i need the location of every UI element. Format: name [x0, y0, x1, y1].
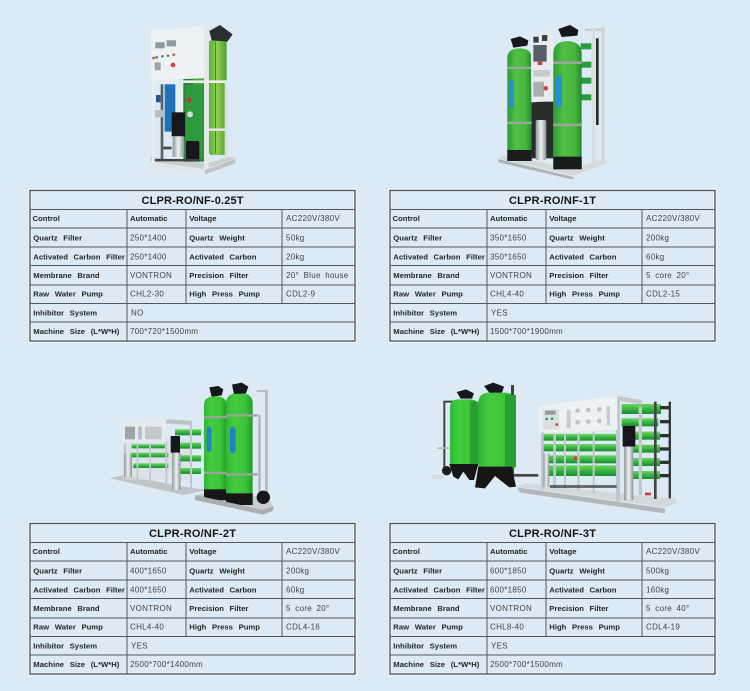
row: membrane brand: 5 core 20°: [646, 271, 690, 280]
row: raw water pump: CDL2-9: [286, 290, 316, 298]
row: machine size: [33, 327, 198, 336]
row: quartz filter: [393, 234, 669, 242]
row: raw water pump: Raw Water Pump: [33, 290, 103, 298]
row: control: AC220V/380V: [286, 214, 340, 223]
row: quartz filter: 200kg: [646, 234, 669, 242]
row: control: [32, 547, 340, 556]
row: inhibitor system: YES: [491, 308, 508, 317]
row: membrane brand: 20° Blue house: [286, 271, 349, 280]
row: raw water pump: [393, 290, 680, 298]
row: activated carbon: [393, 252, 665, 262]
row: raw water pump: CDL2-15: [646, 290, 680, 298]
row: control: Automatic: [490, 214, 528, 223]
row: control: [392, 547, 700, 556]
row: raw water pump: CHL8-40: [490, 622, 524, 632]
row: control: Automatic: [130, 547, 168, 556]
row: activated carbon: Activated Carbon: [189, 586, 257, 594]
row: activated carbon: [33, 586, 305, 594]
row: inhibitor system: Inhibitor System: [33, 641, 97, 650]
row: quartz filter: Quartz Weight: [189, 234, 245, 242]
row: quartz filter: 50kg: [286, 234, 305, 242]
table title: CLPR-RO/NF-1T: [509, 195, 596, 207]
row: activated carbon: Activated Carbon Filter: [33, 586, 125, 594]
row: activated carbon: 250*1400: [130, 252, 167, 262]
row: membrane brand: Membrane Brand: [33, 271, 100, 280]
spec table: CLPR-RO/NF-2T: [30, 524, 355, 674]
row: inhibitor system: YES: [491, 641, 508, 650]
row: quartz filter: Quartz Filter: [33, 234, 82, 242]
row: quartz filter: Quartz Filter: [33, 566, 82, 576]
row: activated carbon: 160kg: [646, 586, 669, 594]
row: control: AC220V/380V: [646, 547, 700, 556]
row: quartz filter: 400*1650: [130, 566, 167, 576]
row: membrane brand: 5 core 40°: [646, 604, 690, 613]
row: control: Voltage: [189, 214, 217, 223]
row: membrane brand: Precision Filter: [189, 271, 248, 280]
row: inhibitor system: Inhibitor System: [393, 641, 457, 650]
row: inhibitor system: [393, 308, 508, 317]
row: machine size: [393, 660, 563, 669]
row: quartz filter: Quartz Weight: [189, 566, 245, 576]
machine photo: CLPR-RO/NF-3T: [432, 383, 676, 513]
row: quartz filter: Quartz Weight: [549, 234, 605, 242]
row: membrane brand: VONTRON: [490, 604, 532, 613]
row: raw water pump: CDL4-19: [646, 622, 680, 632]
row: machine size: 1500*700*1900mm: [490, 327, 563, 336]
row: quartz filter: Quartz Weight: [549, 566, 605, 576]
row: machine size: 2500*700*1400mm: [130, 660, 203, 669]
row: membrane brand: Precision Filter: [549, 604, 608, 613]
spec table: CLPR-RO/NF-3T: [390, 524, 715, 674]
row: machine size: Machine Size (L*W*H): [393, 327, 480, 336]
row: quartz filter: Quartz Filter: [393, 566, 442, 576]
row: membrane brand: Precision Filter: [549, 271, 608, 280]
row: membrane brand: Precision Filter: [189, 604, 248, 613]
row: quartz filter: Quartz Filter: [393, 234, 442, 242]
row: activated carbon: [393, 586, 669, 594]
row: control: AC220V/380V: [286, 547, 340, 556]
row: control: Voltage: [549, 547, 577, 556]
row: control: Control: [32, 547, 60, 556]
row: activated carbon: Activated Carbon: [549, 252, 617, 262]
row: membrane brand: VONTRON: [130, 604, 172, 613]
row: machine size: 700*720*1500mm: [130, 327, 198, 336]
row: raw water pump: CDL4-16: [286, 622, 320, 632]
row: membrane brand: [393, 271, 690, 280]
row: raw water pump: Raw Water Pump: [33, 622, 103, 632]
table grid: [390, 190, 715, 341]
row: activated carbon: [33, 252, 305, 262]
machine photo: CLPR-RO/NF-2T: [110, 383, 273, 515]
spec table: CLPR-RO/NF-0.25T: [30, 190, 355, 341]
row: inhibitor system: NO: [131, 308, 144, 317]
row: machine size: [393, 327, 563, 336]
row: control: Control: [392, 214, 420, 223]
row: control: Automatic: [130, 214, 168, 223]
row: quartz filter: 600*1850: [490, 566, 527, 576]
row: raw water pump: CHL4-40: [130, 622, 164, 632]
row: machine size: [33, 660, 203, 669]
row: control: [32, 214, 340, 223]
row: inhibitor system: YES: [131, 641, 148, 650]
row: quartz filter: 350*1650: [490, 234, 527, 242]
row: membrane brand: [393, 604, 690, 613]
table grid: [390, 524, 715, 674]
row: machine size: Machine Size (L*W*H): [393, 660, 480, 669]
row: activated carbon: 60kg: [646, 252, 665, 262]
row: activated carbon: 600*1850: [490, 586, 527, 594]
row: control: Automatic: [490, 547, 528, 556]
table grid: [30, 524, 355, 674]
row: quartz filter: [33, 234, 305, 242]
row: activated carbon: Activated Carbon Filter: [33, 252, 125, 262]
row: control: Control: [32, 214, 60, 223]
table title: CLPR-RO/NF-0.25T: [142, 195, 244, 207]
row: raw water pump: Raw Water Pump: [393, 290, 463, 298]
table title: CLPR-RO/NF-3T: [509, 528, 596, 540]
row: raw water pump: [33, 622, 320, 632]
row: quartz filter: [393, 566, 669, 576]
row: raw water pump: High Press Pump: [549, 622, 620, 632]
row: membrane brand: [33, 604, 330, 613]
spec table: CLPR-RO/NF-1T: [390, 190, 715, 341]
machine photo: CLPR-RO/NF-0.25T: [150, 25, 236, 174]
row: activated carbon: 350*1650: [490, 252, 527, 262]
row: raw water pump: Raw Water Pump: [393, 622, 463, 632]
row: inhibitor system: [393, 641, 508, 650]
row: inhibitor system: [33, 641, 148, 650]
row: machine size: Machine Size (L*W*H): [33, 660, 120, 669]
row: quartz filter: 250*1400: [130, 234, 167, 242]
row: raw water pump: High Press Pump: [549, 290, 620, 298]
row: control: Control: [392, 547, 420, 556]
row: membrane brand: Membrane Brand: [393, 271, 460, 280]
table grid: [30, 190, 355, 341]
row: activated carbon: Activated Carbon Filter: [393, 586, 485, 594]
row: raw water pump: CHL4-40: [490, 290, 524, 298]
row: machine size: 2500*700*1500mm: [490, 660, 563, 669]
row: membrane brand: VONTRON: [130, 271, 172, 280]
row: activated carbon: 20kg: [286, 252, 305, 262]
row: machine size: Machine Size (L*W*H): [33, 327, 120, 336]
row: raw water pump: CHL2-30: [130, 290, 164, 298]
row: activated carbon: Activated Carbon: [189, 252, 257, 262]
row: inhibitor system: Inhibitor System: [393, 308, 457, 317]
row: control: Voltage: [549, 214, 577, 223]
row: activated carbon: Activated Carbon: [549, 586, 617, 594]
row: raw water pump: High Press Pump: [189, 290, 260, 298]
row: inhibitor system: [33, 308, 144, 317]
row: membrane brand: [33, 271, 349, 280]
row: quartz filter: 500kg: [646, 566, 669, 576]
row: quartz filter: 200kg: [286, 566, 309, 576]
row: membrane brand: Membrane Brand: [393, 604, 460, 613]
row: activated carbon: 400*1650: [130, 586, 167, 594]
row: raw water pump: [33, 290, 316, 298]
row: membrane brand: VONTRON: [490, 271, 532, 280]
row: raw water pump: High Press Pump: [189, 622, 260, 632]
row: control: Voltage: [189, 547, 217, 556]
row: membrane brand: Membrane Brand: [33, 604, 100, 613]
row: quartz filter: [33, 566, 309, 576]
row: activated carbon: Activated Carbon Filter: [393, 252, 485, 262]
row: control: [392, 214, 700, 223]
row: membrane brand: 5 core 20°: [286, 604, 330, 613]
machine photo: CLPR-RO/NF-1T: [498, 25, 607, 180]
row: control: AC220V/380V: [646, 214, 700, 223]
row: activated carbon: 60kg: [286, 586, 305, 594]
table title: CLPR-RO/NF-2T: [149, 528, 236, 540]
row: inhibitor system: Inhibitor System: [33, 308, 97, 317]
row: raw water pump: [393, 622, 680, 632]
